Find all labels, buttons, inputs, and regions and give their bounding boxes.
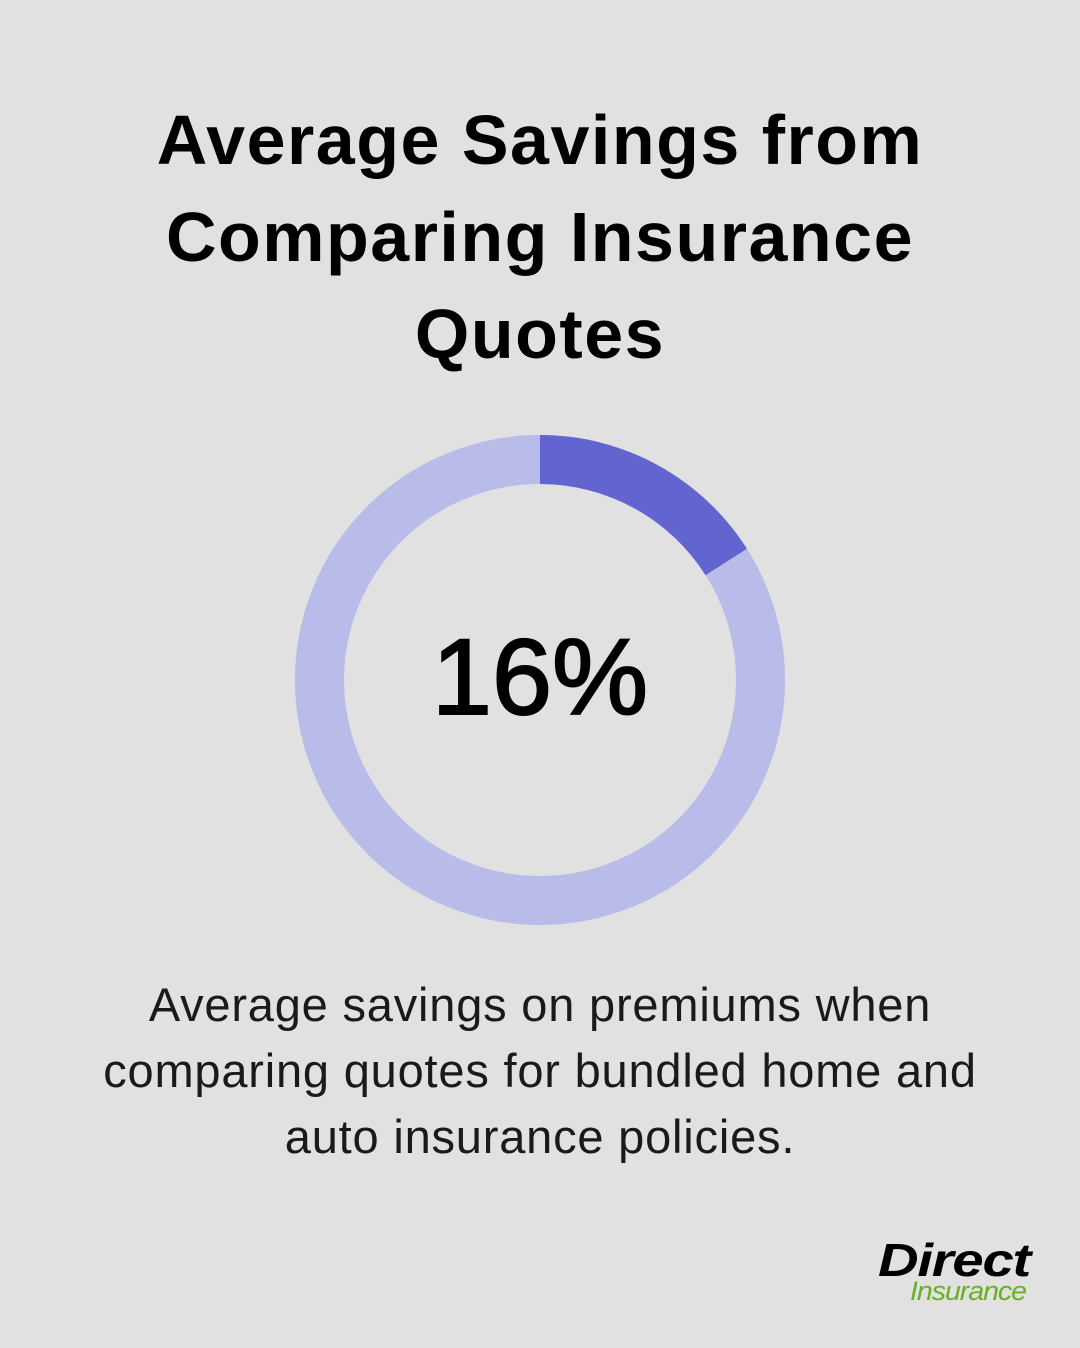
description text: Average savings on premiums when bbox=[149, 978, 931, 1031]
title: Comparing Insurance bbox=[166, 198, 914, 276]
donut chart bbox=[295, 435, 785, 925]
ring: 16% segment bbox=[540, 435, 747, 575]
logo: Insurance bbox=[910, 1276, 1027, 1306]
title bbox=[157, 101, 923, 373]
description text: auto insurance policies. bbox=[285, 1110, 795, 1163]
ring: remainder bbox=[320, 460, 760, 900]
description text: comparing quotes for bundled home and bbox=[103, 1044, 977, 1097]
title: Average Savings from bbox=[157, 101, 923, 179]
title: Quotes bbox=[415, 295, 665, 373]
logo: Direct bbox=[878, 1234, 1033, 1286]
value label: 16% bbox=[432, 616, 648, 737]
description text bbox=[103, 978, 977, 1163]
logo bbox=[878, 1234, 1034, 1306]
